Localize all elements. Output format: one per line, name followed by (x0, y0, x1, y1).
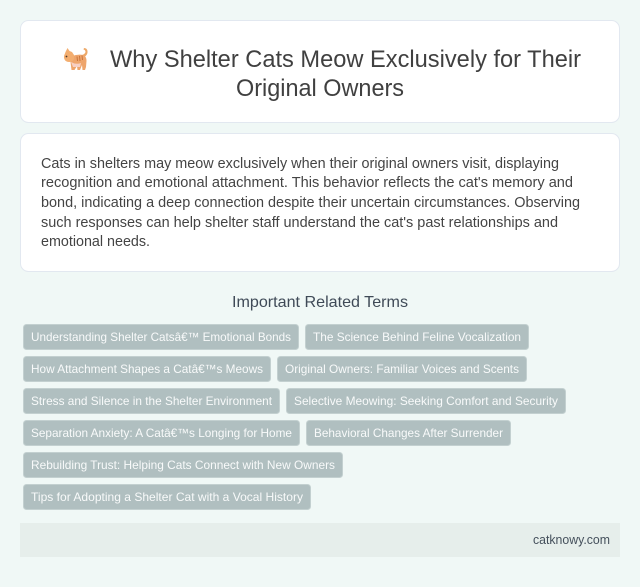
title (110, 46, 581, 102)
heading: related terms: Important Related Terms (232, 294, 408, 311)
tag (24, 388, 280, 414)
tag (278, 356, 526, 382)
text block: description: such responses can help shelter staff understand the cat's past relationships and (41, 215, 558, 231)
tag (24, 452, 342, 478)
tag (24, 356, 270, 382)
panel: description (20, 134, 620, 272)
tag: Separation Anxiety: A Catâ€™s Longing for Home (31, 426, 292, 440)
tag: Understanding Shelter Catsâ€™ Emotional Bonds (31, 330, 291, 344)
title: Original Owners (236, 75, 404, 102)
panel: title header (20, 20, 620, 122)
tag (24, 324, 298, 350)
tag list (24, 324, 566, 510)
text block: description: Cats in shelters may meow exclusively when their original owners visit, displaying (41, 156, 559, 172)
tag: Behavioral Changes After Surrender (314, 426, 503, 440)
tag (24, 484, 310, 510)
footer: catknowy.com (533, 533, 610, 547)
tag (24, 420, 300, 446)
text block: description: recognition and emotional attachment. This behavior reflects the cat's memory and (41, 175, 573, 191)
tag: Selective Meowing: Seeking Comfort and Security (294, 394, 558, 408)
icon: orange cat (64, 48, 88, 70)
tag: Original Owners: Familiar Voices and Scents (285, 362, 519, 376)
tag: How Attachment Shapes a Catâ€™s Meows (31, 362, 263, 376)
tag: Rebuilding Trust: Helping Cats Connect with New Owners (31, 458, 335, 472)
footer (20, 523, 620, 557)
tag: Stress and Silence in the Shelter Environment (31, 394, 273, 408)
tag: Tips for Adopting a Shelter Cat with a Vocal History (31, 490, 303, 504)
tag (286, 388, 566, 414)
text block: description: bond, indicating a deep connection despite their uncertain circumstances. Observing (41, 195, 580, 211)
tag (306, 420, 510, 446)
tag: The Science Behind Feline Vocalization (313, 330, 521, 344)
text block: description (41, 156, 580, 250)
tag (306, 324, 528, 350)
title: Why Shelter Cats Meow Exclusively for Their (110, 46, 581, 73)
text block: description: emotional needs. (41, 234, 150, 250)
